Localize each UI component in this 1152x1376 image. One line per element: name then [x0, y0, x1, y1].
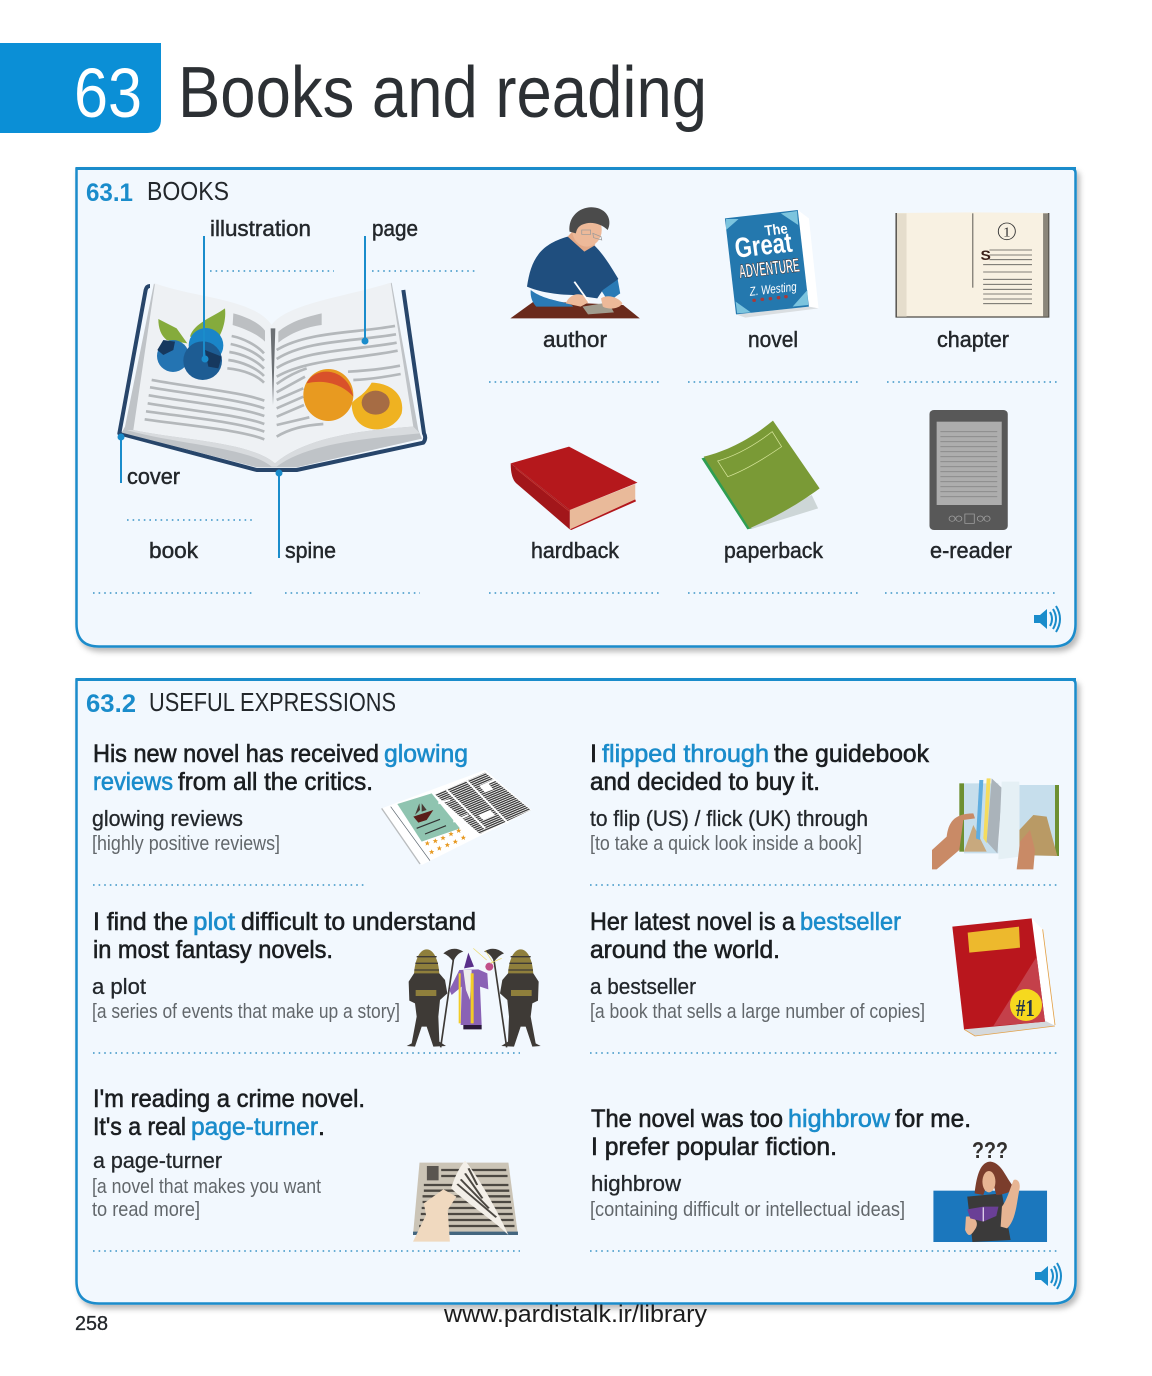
- icon: newspaper review: [382, 770, 532, 865]
- expression: highbrow: for me.: [895, 1105, 971, 1133]
- label: paperback: paperback: [724, 538, 824, 563]
- expression: bestseller: [590, 908, 1059, 1053]
- expression: flipped through: the guidebook: [774, 740, 929, 768]
- expression: flipped through: to flip (US) / flick (UK) through: [590, 806, 868, 831]
- expression: glowing reviews: His new novel has received: [93, 740, 379, 768]
- icon: chapter: 1: [1003, 225, 1011, 240]
- expression: highbrow: highbrow: [591, 1171, 681, 1196]
- expression: flipped through: flipped through: [602, 740, 769, 768]
- label: novel: novel: [748, 327, 798, 352]
- expression: highbrow: The novel was too: [591, 1105, 783, 1133]
- heading: 63.2 USEFUL EXPRESSIONS: [86, 687, 396, 718]
- label: hardback: hardback: [531, 538, 620, 563]
- label: spine: spine: [285, 538, 336, 563]
- panel: 63.1 books: [76, 167, 1076, 646]
- pointer: spine: [276, 470, 282, 558]
- pointer: page: [362, 236, 368, 344]
- page number: 258: [75, 1313, 108, 1335]
- heading: 63.1 BOOKS: [86, 176, 229, 207]
- expression: plot: [92, 908, 520, 1053]
- icon: novel: Great: [733, 227, 794, 264]
- icon: e-reader: [929, 410, 1008, 530]
- pointer: illustration: [202, 236, 208, 362]
- expression: flipped through: and decided to buy it.: [590, 768, 820, 796]
- icon: audio speaker: [1034, 606, 1060, 632]
- expression: highbrow: highbrow: [788, 1105, 891, 1133]
- expression: flipped through: [to take a quick look inside a book]: [590, 833, 862, 855]
- expression: plot: a plot: [92, 974, 146, 999]
- title: Books and reading: [178, 53, 707, 133]
- icon: hand turning book page: [413, 1161, 518, 1242]
- label: book: book: [149, 538, 199, 563]
- expression: glowing reviews: [92, 740, 468, 885]
- icon: bestseller book: [952, 918, 1055, 1036]
- expression: bestseller: [a book that sells a large number of copies]: [590, 1001, 925, 1023]
- header: chapter number tab: [0, 43, 161, 133]
- expression: glowing reviews: [highly positive reviews]: [92, 833, 280, 855]
- icon: fantasy guards and wizard: [407, 948, 541, 1047]
- expression: page-turner: [a novel that makes you want: [92, 1176, 321, 1198]
- footer url: www.pardistalk.ir/library: [443, 1301, 707, 1328]
- icon: author: [510, 207, 640, 318]
- expression: page-turner: I'm reading a crime novel.: [93, 1085, 365, 1113]
- icon: bestseller book: #1: [1016, 996, 1035, 1022]
- expression: page-turner: a page-turner: [93, 1148, 222, 1173]
- expression: glowing reviews: reviews: [93, 768, 173, 796]
- expression: page-turner: page-turner: [191, 1113, 318, 1141]
- label: cover: cover: [127, 464, 180, 489]
- expression: glowing reviews: glowing: [384, 740, 468, 768]
- illustration: open book: [119, 283, 425, 470]
- label: cover: [127, 464, 254, 520]
- expression: page-turner: to read more]: [92, 1199, 200, 1221]
- icon: chapter: S: [981, 249, 991, 264]
- expression: page-turner: [92, 1085, 520, 1251]
- icon: novel: [725, 210, 819, 318]
- expression: plot: I find the: [93, 908, 188, 936]
- heading: 63.1 BOOKS: BOOKS: [147, 176, 229, 206]
- header: chapter number tab: 63: [74, 54, 142, 132]
- icon: chapter: [896, 212, 1049, 318]
- label: illustration: [210, 216, 334, 271]
- label: chapter: chapter: [937, 327, 1009, 352]
- icon: audio speaker: [1035, 1263, 1061, 1289]
- expression: highbrow: I prefer popular fiction.: [591, 1133, 837, 1161]
- label: page: [372, 216, 476, 271]
- label: illustration: illustration: [210, 216, 311, 241]
- expression: bestseller: around the world.: [590, 936, 780, 964]
- label: author: author: [543, 327, 607, 352]
- label: spine: [285, 538, 420, 593]
- icon: novel: Z. Westing: [748, 279, 798, 299]
- heading: 63.1 BOOKS: 63.1: [86, 179, 133, 207]
- expression: flipped through: I: [590, 740, 597, 768]
- icon: novel: The: [764, 221, 789, 239]
- expression: glowing reviews: glowing reviews: [92, 806, 243, 831]
- expression: glowing reviews: from all the critics.: [178, 768, 373, 796]
- icon: novel: ADVENTURE: [738, 255, 801, 283]
- expression: highbrow: [590, 1105, 1057, 1251]
- expression: plot: in most fantasy novels.: [93, 936, 333, 964]
- panel: 63.2 useful expressions: [76, 678, 1076, 1304]
- icon: hands flipping guidebook: [932, 778, 1059, 869]
- expression: page-turner: .: [318, 1113, 325, 1141]
- expression: bestseller: bestseller: [800, 908, 901, 936]
- expression: plot: plot: [193, 908, 235, 936]
- pointer: cover: [118, 434, 124, 483]
- heading: 63.2 USEFUL EXPRESSIONS: 63.2: [86, 690, 136, 718]
- expression: plot: [a series of events that make up a story]: [92, 1001, 400, 1023]
- icon: confused reader: [933, 1162, 1047, 1242]
- text: question marks: ???: [972, 1137, 1008, 1163]
- expression: bestseller: a bestseller: [590, 974, 696, 999]
- label: e-reader: e-reader: [930, 538, 1012, 563]
- icon: paperback: [701, 421, 820, 529]
- expression: plot: difficult to understand: [241, 908, 476, 936]
- label: page: page: [372, 216, 418, 241]
- expression: bestseller: Her latest novel is a: [590, 908, 795, 936]
- expression: flipped through: [590, 740, 1059, 885]
- heading: 63.2 USEFUL EXPRESSIONS: USEFUL EXPRESSIONS: [149, 687, 396, 717]
- expression: page-turner: It's a real: [93, 1113, 186, 1141]
- expression: highbrow: [containing difficult or intellectual ideas]: [590, 1199, 905, 1221]
- icon: hardback: [511, 447, 638, 530]
